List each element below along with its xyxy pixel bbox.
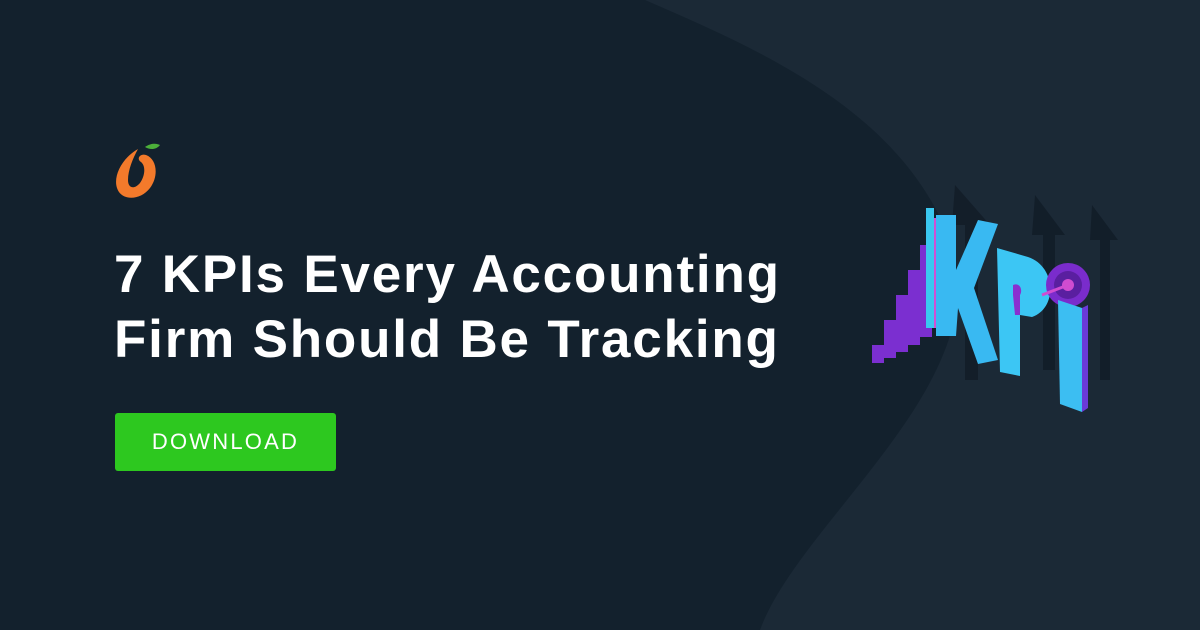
i: [1058, 300, 1082, 412]
title: Firm Should Be Tracking: [114, 310, 780, 369]
illustration: KPI 3D letters: [872, 186, 1118, 412]
title: 7 KPIs Every Accounting: [114, 245, 781, 304]
button: download: [115, 413, 336, 471]
target: [1046, 263, 1090, 307]
title: [114, 245, 781, 369]
K: [936, 215, 998, 364]
P: [997, 248, 1050, 376]
logo: [116, 144, 160, 198]
button: download: DOWNLOAD: [152, 429, 299, 454]
